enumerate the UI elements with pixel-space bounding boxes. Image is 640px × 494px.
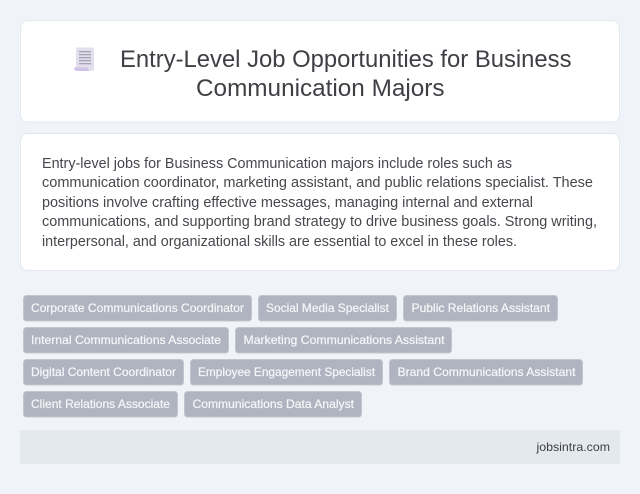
tag: Communications Data Analyst: Communications Data Analyst (192, 397, 355, 411)
text block: description: interpersonal, and organizational skills are essential to excel in these roles. (42, 234, 517, 250)
icon: document scroll (74, 48, 94, 71)
footer bar (20, 430, 620, 464)
title: Communication Majors (196, 75, 444, 102)
tag: Communications Data Analyst (184, 392, 362, 417)
tag: Employee Engagement Specialist (190, 360, 382, 385)
tag: Client Relations Associate: Client Relations Associate (31, 397, 170, 411)
tag: Marketing Communications Assistant: Marketing Communications Assistant (244, 333, 445, 347)
tag: Marketing Communications Assistant (236, 328, 452, 353)
tag: Internal Communications Associate (24, 328, 228, 353)
tag: Social Media Specialist (258, 296, 396, 321)
text block: description: positions involve crafting effective messages, managing internal and external (42, 195, 533, 211)
title (120, 46, 572, 102)
tag: Brand Communications Assistant (390, 360, 582, 385)
footer text: source: jobsintra.com (535, 440, 610, 454)
tag: Brand Communications Assistant: Brand Communications Assistant (398, 365, 576, 379)
tag: Internal Communications Associate: Internal Communications Associate (31, 333, 221, 347)
panel: description card (20, 134, 620, 270)
tag: Social Media Specialist: Social Media Specialist (266, 301, 390, 315)
tag: Public Relations Assistant: Public Relations Assistant (412, 301, 551, 315)
tag list: job titles (24, 296, 582, 417)
text block: description: communication coordinator, marketing assistant, and public relations specialist. These (42, 175, 593, 191)
text block: description (42, 156, 597, 250)
panel: header card (20, 20, 620, 122)
tag: Employee Engagement Specialist: Employee Engagement Specialist (198, 365, 376, 379)
tag: Digital Content Coordinator (24, 360, 184, 385)
tag: Corporate Communications Coordinator (24, 296, 252, 321)
tag: Corporate Communications Coordinator: Corporate Communications Coordinator (31, 301, 244, 315)
tag: Public Relations Assistant (404, 296, 558, 321)
text block: description: communications, and supporting brand strategy to drive business goals. Strong writing, (42, 214, 597, 230)
text block: description: Entry-level jobs for Business Communication majors include roles such as (42, 156, 512, 172)
tag: Digital Content Coordinator: Digital Content Coordinator (31, 365, 176, 379)
tag: Client Relations Associate (24, 392, 178, 417)
title: Entry-Level Job Opportunities for Business (120, 46, 572, 73)
